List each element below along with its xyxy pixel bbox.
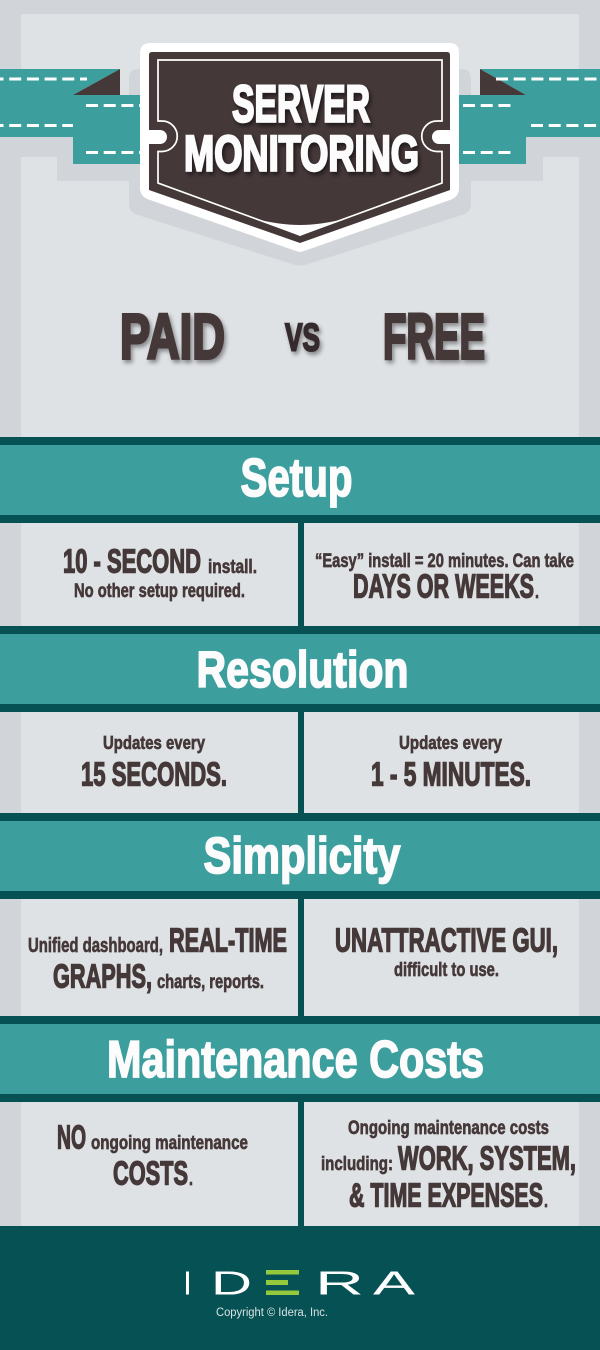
paid setup text [63,542,257,602]
paid setup text: install. [208,557,257,578]
heading: maintenance costs: Maintenance Costs [107,1031,484,1089]
paid simplicity text: GRAPHS, [53,958,152,994]
paid simplicity text: charts, reports. [157,972,264,993]
logo: Idera [183,1266,416,1302]
section: setup [0,437,600,634]
free setup text [315,551,574,604]
free resolution text: Updates every [399,733,502,753]
ribbon and badge shadow [0,69,600,266]
free simplicity text [335,922,558,981]
title badge [140,43,459,252]
paid simplicity text: REAL-TIME [169,922,287,958]
footer [0,1226,600,1350]
logo: Idera: R [315,1266,364,1302]
free simplicity text: difficult to use. [394,960,499,981]
comparison heading: paid vs free: PAID [120,300,225,372]
paid maintenance text: NO [57,1118,86,1156]
logo: Idera: A [373,1266,416,1302]
heading: simplicity: Simplicity [204,827,401,884]
header panel [21,14,579,437]
left ribbon [0,69,141,164]
comparison heading: paid vs free: VS [285,316,320,360]
paid simplicity text [28,922,287,994]
logo: Idera: I [183,1266,192,1302]
paid setup text: No other setup required. [74,581,245,602]
paid resolution text: 15 SECONDS. [81,756,227,792]
comparison heading: paid vs free: FREE [383,300,485,372]
paid maintenance text: ongoing maintenance [91,1133,248,1154]
section: maintenance costs [0,1016,600,1226]
paid resolution text: Updates every [103,733,205,753]
paid maintenance text: . [189,1169,193,1190]
title text: SERVER [232,76,370,134]
section: simplicity [0,813,600,1024]
paid maintenance text: COSTS [113,1154,188,1192]
free maintenance text: Ongoing maintenance costs [348,1118,549,1139]
free resolution text: 1 - 5 MINUTES. [371,756,531,792]
logo: Idera: D [211,1266,252,1302]
copyright: Copyright © Idera, Inc. [216,1307,328,1319]
free resolution text [371,733,531,792]
free maintenance text: including: [321,1154,393,1175]
title text [184,76,419,182]
paid simplicity text: Unified dashboard, [28,935,163,957]
heading: resolution: Resolution [196,641,408,698]
section: resolution [0,626,600,821]
paid setup text: 10 - SECOND [63,542,201,580]
paid resolution text [81,733,227,792]
free maintenance text: . [544,1191,548,1212]
right ribbon [458,69,600,164]
title text: MONITORING [184,126,419,182]
heading: setup: Setup [240,448,352,508]
free maintenance text [321,1118,576,1214]
paid maintenance text [57,1118,248,1192]
comparison heading: paid vs free [120,300,485,372]
free setup text: . [535,582,539,603]
